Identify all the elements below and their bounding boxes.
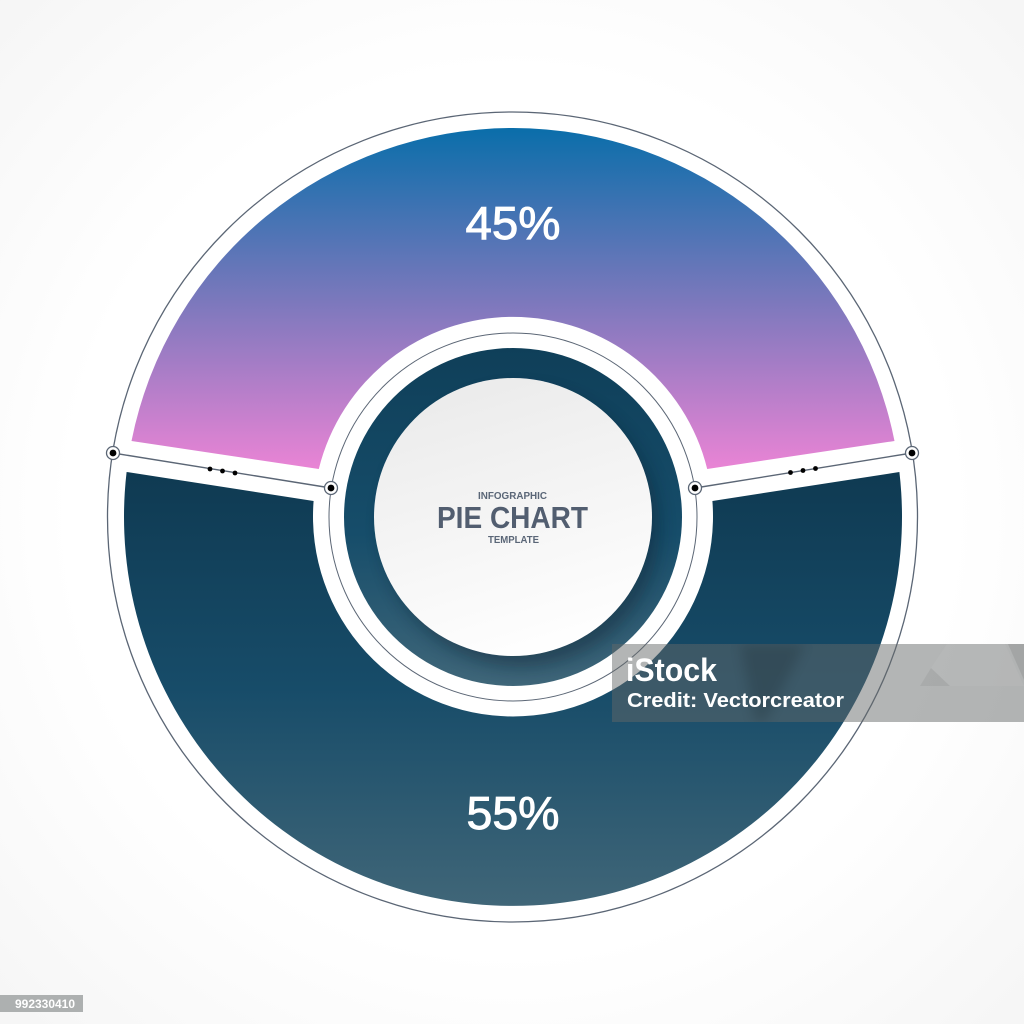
inner ring line	[329, 333, 697, 701]
outer ring line	[108, 112, 918, 922]
disc shadow	[384, 428, 664, 672]
image id tag: 992330410	[15, 997, 75, 1011]
right connector	[688, 446, 918, 494]
watermark credit: Credit: Vectorcreator	[627, 690, 844, 712]
label: 45%: 45%	[466, 197, 560, 249]
centre disc: TEMPLATE	[488, 534, 539, 546]
segment: 45%	[132, 128, 894, 469]
left connector	[106, 446, 338, 494]
centre disc: PIE CHART	[437, 500, 588, 535]
watermark	[612, 644, 1024, 722]
centre disc	[374, 378, 652, 656]
centre title: INFOGRAPHIC	[478, 490, 547, 502]
dark inner ring	[344, 348, 682, 686]
watermark brand: iStock	[626, 652, 717, 688]
segment: 55%	[124, 472, 902, 906]
label: 55%: 55%	[466, 787, 560, 839]
image id tag	[0, 995, 83, 1012]
